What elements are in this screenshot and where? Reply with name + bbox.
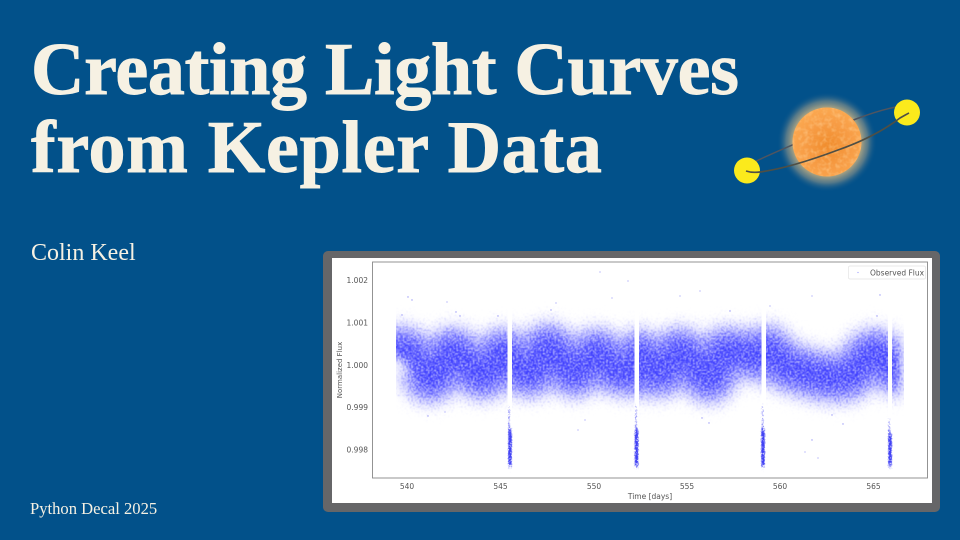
y axis tick labels: 0.998 [347,446,368,454]
planet left [734,158,760,184]
x axis tick labels: 545 [493,482,508,491]
scatter: transit dips [509,405,890,468]
x axis tick labels: 555 [680,482,694,491]
y axis tick labels [347,276,368,454]
speckled points of band [397,348,903,378]
y axis tick labels: 0.999 [347,403,368,412]
x axis tick labels: 565 [866,482,881,491]
chart image area [332,258,932,503]
legend: Observed Flux [870,268,925,278]
axes frame [372,262,928,478]
scatter: outlier points [401,271,881,459]
x axis tick labels: 540 [400,482,414,491]
legend [848,266,926,279]
x axis tick labels [400,482,881,491]
x axis label: Time [days] [627,492,672,501]
star body [792,108,862,176]
star glow [777,92,877,192]
soft base of band [397,348,903,378]
author name: Colin Keel [31,240,136,266]
icon: star with transiting planet orbit [734,95,920,189]
y axis tick labels: 1.002 [347,276,368,285]
title: Creating Light Curves [31,29,739,111]
title [31,29,739,189]
scatter: flux band [397,348,903,378]
title: from Kepler Data [31,107,603,189]
x axis tick labels: 550 [587,482,601,491]
y axis tick labels: 1.000 [347,361,368,370]
y axis label: Normalized Flux [336,342,344,398]
x axis tick labels: 560 [773,482,787,491]
panel: light curve chart frame [323,251,940,512]
planet right [894,100,920,126]
orbit: back arc [752,107,896,163]
y axis tick labels: 1.001 [347,318,368,328]
orbit: front arc [746,113,909,172]
footer label: Python Decal 2025 [30,499,157,518]
scatter chart: observed flux [336,262,928,501]
